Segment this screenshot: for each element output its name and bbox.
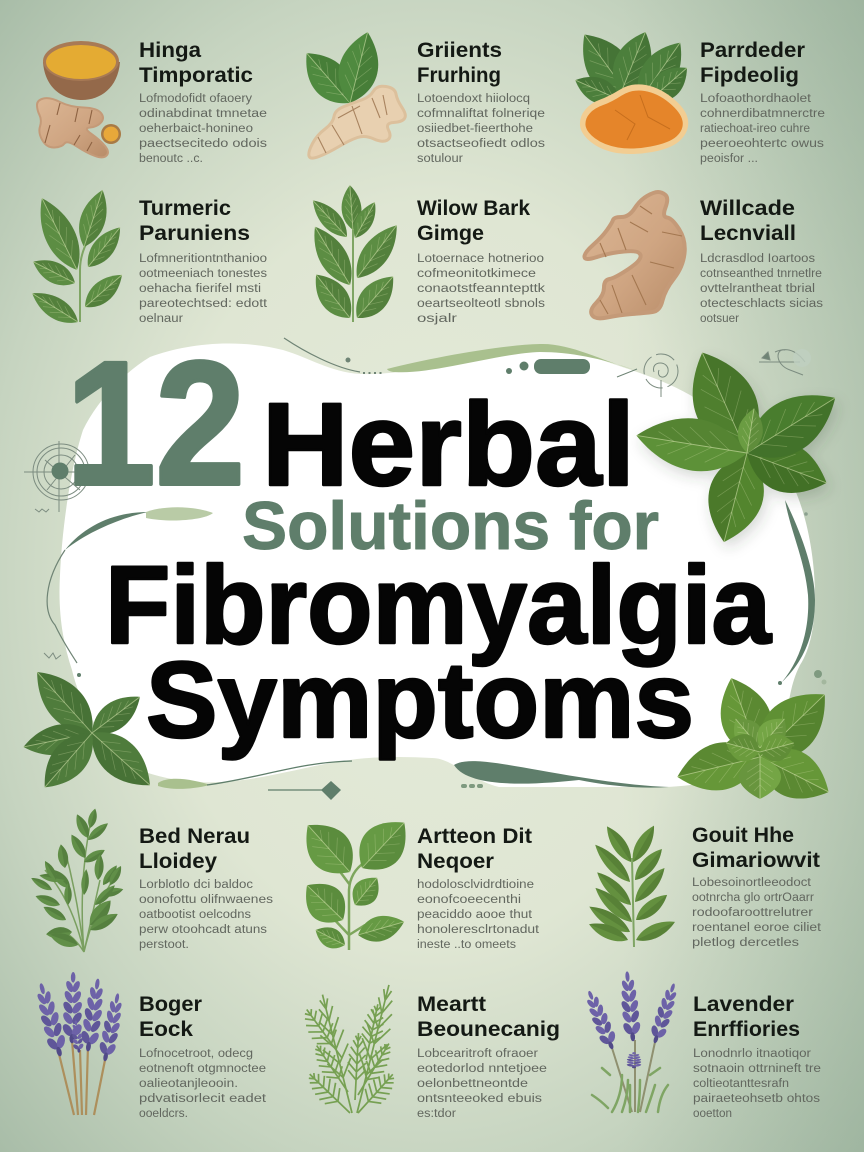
panel: item 5 Wilow Bark Gimge	[303, 184, 545, 327]
text block: conaotstfeanntepttk	[417, 283, 545, 295]
heading: Timporatic	[139, 64, 253, 87]
heading: Bed Nerau	[139, 825, 250, 848]
text block: Lobesoinortleeodoct	[692, 877, 812, 889]
text block	[139, 93, 267, 165]
icon: ginger with leaves	[293, 27, 405, 158]
text block	[417, 93, 545, 165]
text block	[139, 1048, 267, 1120]
text block: ineste ..to omeets	[417, 939, 516, 951]
panel: item 1 Hinga Timporatic	[37, 39, 267, 165]
heading: Eock	[139, 1018, 193, 1041]
icon: spiral emblem	[644, 354, 678, 397]
heading	[700, 197, 796, 245]
heading: Gimge	[417, 222, 484, 245]
text block: Lofnocetroot, odecg	[139, 1048, 253, 1060]
heading	[139, 825, 250, 873]
heading: Artteon Dit	[417, 825, 532, 848]
icon: sprig	[27, 186, 129, 331]
text block: ontsnteeoked ebuis	[417, 1093, 542, 1105]
icon: sketch top right	[759, 349, 811, 375]
icon: squiggle left	[44, 653, 61, 659]
icon: pinnate sprig	[586, 822, 678, 947]
text block: osiiedbet-fieerthohe	[417, 123, 533, 135]
text block: cofmeonitotkimece	[417, 268, 536, 280]
heading: Gouit Hhe	[692, 824, 794, 847]
text block: peoisfor ...	[700, 153, 758, 165]
text block	[417, 879, 540, 951]
heading	[139, 993, 202, 1041]
text block: otecteschlacts sicias	[700, 298, 823, 310]
text block: Lofoaothordhaolet	[700, 93, 812, 105]
panel: item 8 Artteon Dit Neqoer	[292, 808, 540, 954]
text block: ovttelrantheat tbrial	[700, 283, 815, 295]
heading: Symptoms: Symptoms	[146, 639, 694, 760]
text block: eotedorlod nntetjoee	[417, 1063, 547, 1075]
icon: lavender plant	[580, 970, 683, 1112]
text block	[417, 1048, 547, 1120]
heading: Parrdeder	[700, 39, 805, 62]
title	[66, 326, 772, 760]
number 12: 12	[66, 326, 245, 522]
heading	[417, 993, 560, 1041]
text block: es:tdor	[417, 1108, 456, 1120]
heading	[693, 993, 800, 1041]
text block	[692, 877, 822, 949]
heading: Fibromyalgia: Fibromyalgia	[105, 544, 772, 667]
text block: hodolosclvidrdtioine	[417, 879, 534, 891]
heading: Gimariowvit	[692, 849, 820, 872]
text block: oatbootist oelcodns	[139, 909, 251, 921]
leaf cluster: bottom right	[672, 670, 843, 813]
text block: pdvatisorlecit eadet	[139, 1093, 267, 1105]
heading: Griients	[417, 39, 502, 62]
heading: Frurhing	[417, 64, 501, 87]
text block: oeherbaict-honineo	[139, 123, 253, 135]
text block: Ldcrasdlod Ioartoos	[700, 253, 815, 265]
heading: Lecnviall	[700, 222, 796, 245]
panel: item 10 Boger Eock	[30, 972, 267, 1120]
panel: item 12 Lavender Enrffiories	[580, 970, 821, 1120]
text block: coltieotanttesrafn	[693, 1078, 789, 1090]
text block: cohnerdibatmnerctre	[700, 108, 825, 120]
text block: Lotoendoxt hiiolocq	[417, 93, 530, 105]
text block: benoutc ..c.	[139, 153, 203, 165]
icon: feathery herb	[296, 982, 402, 1121]
heading: Lloidey	[139, 850, 217, 873]
heading: Lavender	[693, 993, 794, 1016]
heading: Paruniens	[139, 222, 250, 245]
heading	[139, 197, 250, 245]
decorative swooshes	[47, 338, 827, 789]
text block: oonofottu olifnwaenes	[139, 894, 273, 906]
heading	[700, 39, 805, 87]
panel: white central blob	[60, 344, 815, 787]
text block: ootmeeniach tonestes	[139, 268, 267, 280]
heading: Herbal: Herbal	[262, 379, 635, 511]
icon: bushy sprig	[29, 808, 124, 952]
text block: osjalr	[417, 313, 457, 325]
leaf cluster: top right	[632, 340, 849, 549]
text block: Lonodnrlo itnaotiqor	[693, 1048, 811, 1060]
icon: ginger root	[584, 192, 685, 318]
text block: eonofcoeecenthi	[417, 894, 521, 906]
text block: cofmnaliftat folneriqe	[417, 108, 545, 120]
text block: ooeldcrs.	[139, 1108, 188, 1120]
text block: Lotoernace hotnerioo	[417, 253, 544, 265]
icon: broad leaf plant	[292, 808, 420, 954]
heading	[417, 197, 530, 245]
text block: honoleresclrtonadut	[417, 924, 540, 936]
leaf cluster: bottom left	[20, 660, 162, 799]
panel: item 6 Willcade Lecnviall	[584, 192, 823, 325]
heading: Hinga	[139, 39, 201, 62]
text block: odinabdinat tmnetae	[139, 108, 267, 120]
heading: Boger	[139, 993, 202, 1016]
heading: Solutions for: Solutions for	[242, 488, 659, 564]
text block: oalieotanjleooin.	[139, 1078, 238, 1090]
heading: Beounecanig	[417, 1018, 560, 1041]
panel: item 7 Bed Nerau Lloidey	[29, 808, 273, 952]
text block: pletlog dercetles	[692, 937, 799, 949]
heading	[417, 825, 532, 873]
text block: oelonbettneontde	[417, 1078, 528, 1090]
text block	[700, 93, 825, 165]
panel: item 4 Turmeric Paruniens	[27, 186, 268, 331]
heading	[417, 39, 502, 87]
text block: peeroeohtertc owus	[700, 138, 824, 150]
text block: paectsecitedo odois	[139, 138, 267, 150]
text block	[417, 253, 545, 325]
text block: rodoofaroottrelutrer	[692, 907, 813, 919]
heading: Enrffiories	[693, 1018, 800, 1041]
text block: ootnrcha glo ortrOaarr	[692, 892, 814, 904]
text block: peaciddo aooe thut	[417, 909, 533, 921]
heading: Fipdeolig	[700, 64, 799, 87]
diamond marker	[268, 781, 341, 800]
text block: ootsuer	[700, 313, 739, 325]
text block: oelnaur	[139, 313, 183, 325]
heading: Wilow Bark	[417, 197, 530, 220]
text block: otsactseofiedt odlos	[417, 138, 545, 150]
text block: ratiechoat-ireo cuhre	[700, 123, 810, 135]
text block: eotnenoft otgmnoctee	[139, 1063, 266, 1075]
text block: pareotechtsed: edott	[139, 298, 268, 310]
text block	[139, 253, 268, 325]
text block	[139, 879, 273, 951]
panel: item 9 Gouit Hhe Gimariowvit	[586, 822, 822, 949]
panel: item 2 Griients Frurhing	[293, 27, 545, 165]
heading	[139, 39, 253, 87]
text block: oeartseolteotl sbnols	[417, 298, 545, 310]
heading: Willcade	[700, 197, 795, 220]
text block	[700, 253, 823, 325]
text block: Lorblotlo dci baldoc	[139, 879, 253, 891]
text block: cotnseanthed tnrnetlre	[700, 268, 822, 280]
heading: Meartt	[417, 993, 486, 1016]
text block: perw otoohcadt atuns	[139, 924, 267, 936]
heading: Neqoer	[417, 850, 494, 873]
icon: turmeric bowl and root	[37, 41, 121, 157]
text block: roentanel eoroe ciliet	[692, 922, 822, 934]
heading	[692, 824, 820, 872]
text block: Lofmodofidt ofaoery	[139, 93, 252, 105]
icon: target	[24, 441, 90, 512]
text block: sotulour	[417, 153, 463, 165]
text block	[693, 1048, 821, 1120]
text block: perstoot.	[139, 939, 189, 951]
text block: Lofmneritiontnthanioo	[139, 253, 267, 265]
text block: Lobcearitroft ofraoer	[417, 1048, 538, 1060]
text block: sotnaoin ottrnineft tre	[693, 1063, 821, 1075]
panel: item 11 Meartt Beounecanig	[296, 982, 560, 1121]
text block: ooetton	[693, 1108, 732, 1120]
icon: turmeric powder with leaves	[567, 22, 696, 153]
text block: pairaeteohsetb ohtos	[693, 1093, 820, 1105]
panel: item 3 Parrdeder Fipdeolig	[567, 22, 825, 165]
text block: oehacha fierifel msti	[139, 283, 261, 295]
heading: Turmeric	[139, 197, 231, 220]
icon: lavender bundle	[30, 972, 127, 1115]
icon: sprig	[303, 184, 407, 327]
